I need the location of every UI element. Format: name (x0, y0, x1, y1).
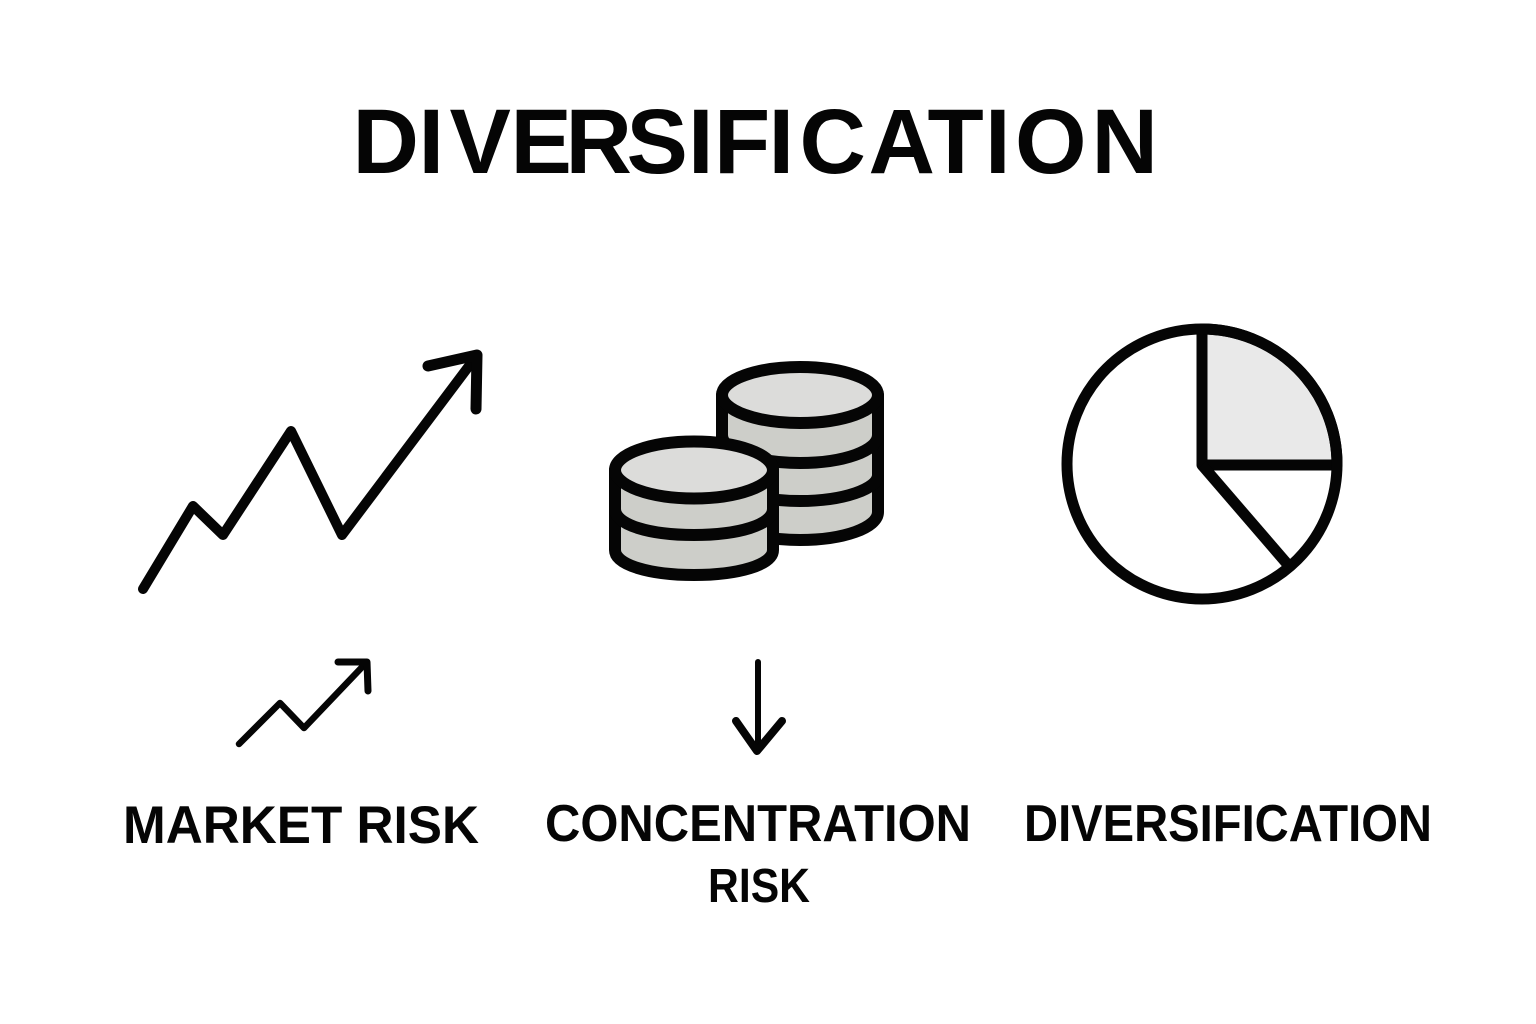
label: diversification: DIVERSIFICATION (1024, 795, 1432, 853)
label: market risk: MARKET RISK (123, 796, 479, 855)
icon: small rising arrow (239, 662, 368, 744)
title: DIVERSIFICATION (352, 91, 1158, 193)
icon: coin stacks (615, 367, 878, 575)
pie outline (1067, 329, 1337, 599)
shaded pie slice (1202, 329, 1337, 465)
back coin stack (722, 367, 878, 540)
pie divider (1202, 465, 1289, 566)
icon: pie chart (1067, 329, 1337, 599)
icon: large rising line chart arrow (143, 355, 477, 589)
label: concentration risk: RISK (708, 860, 810, 913)
icon: down arrow (736, 662, 782, 751)
label: concentration risk (545, 795, 971, 913)
front coin stack (615, 442, 773, 575)
label: concentration risk: CONCENTRATION (545, 795, 971, 853)
